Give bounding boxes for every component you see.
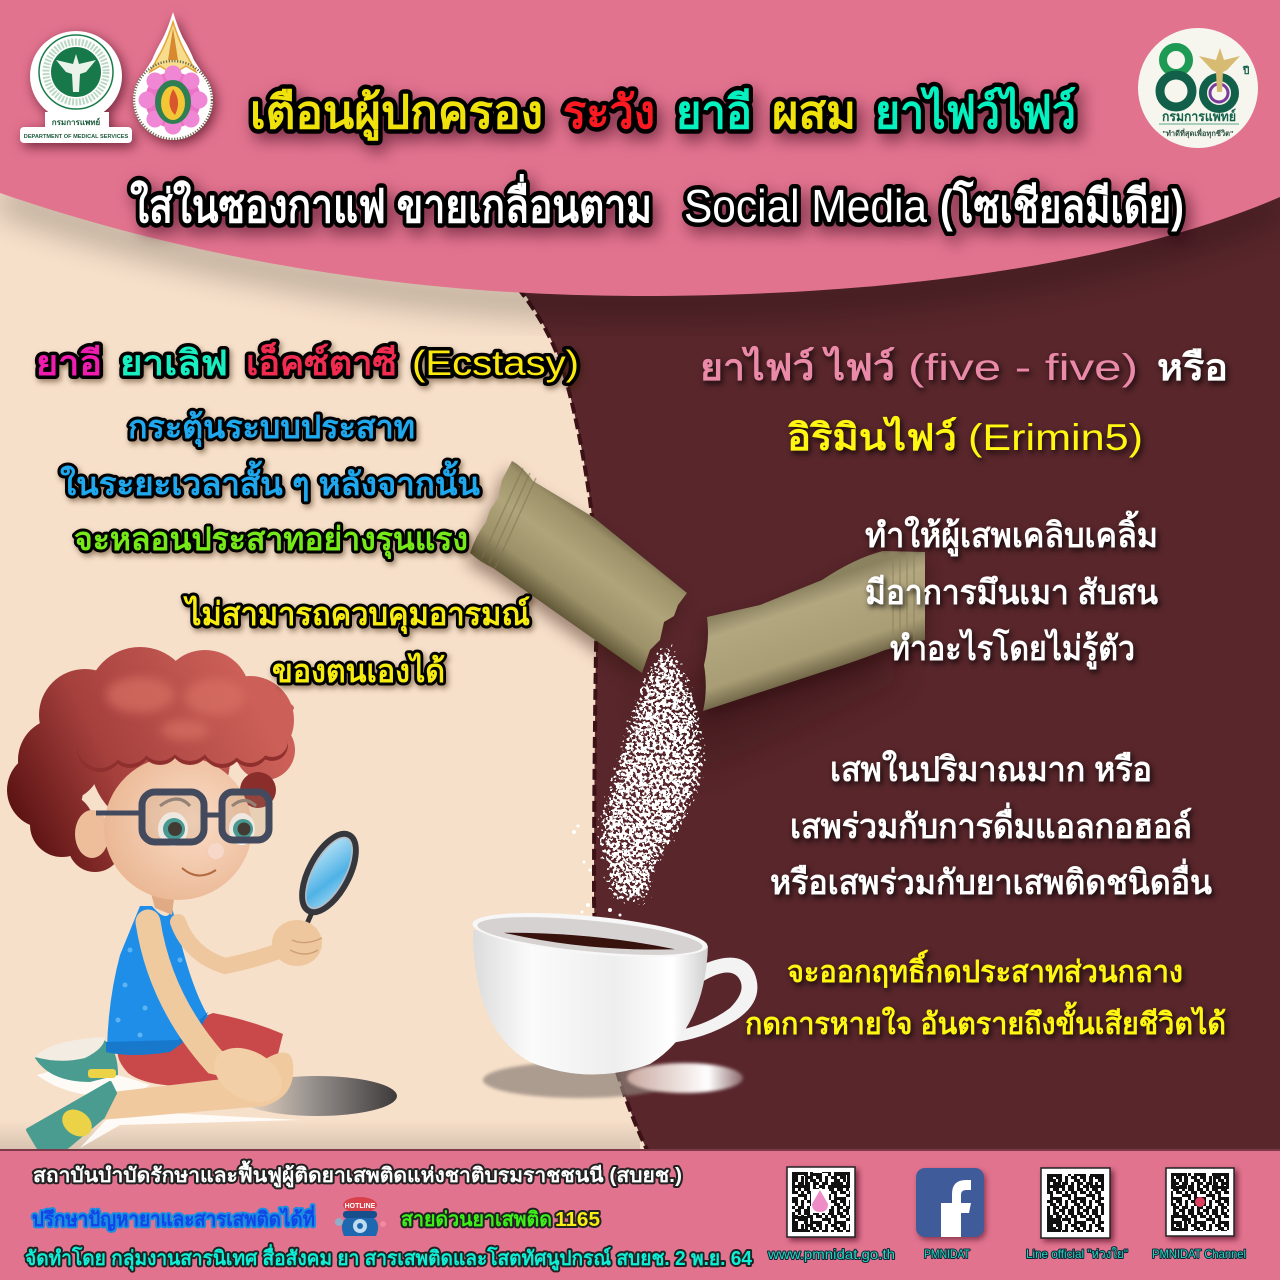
back hair right — [240, 772, 276, 808]
magnifying glass — [291, 826, 367, 926]
icon: facebook — [916, 1168, 984, 1237]
hair fringe — [70, 675, 288, 768]
text: overdose: หรือเสพร่วมกับยาเสพติดชนิดอื่น — [770, 858, 1212, 902]
heading: ecstasy: เอ็คซ์ตาซี — [246, 341, 397, 383]
title line 1: ระวัง — [563, 86, 655, 138]
logo: ministry of public health: DEPARTMENT OF MEDICAL SERVICES — [24, 134, 128, 140]
text: effects — [865, 510, 1158, 670]
shorts — [118, 1013, 283, 1086]
logo: 80 years — [1138, 28, 1258, 148]
heading: ecstasy: ยาเลิฟ — [120, 344, 228, 383]
text: overdose: เสพร่วมกับการดื่มแอลกอฮอล์ — [790, 802, 1192, 846]
text: stimulates nerves: กระตุ้นระบบประสาท — [128, 409, 415, 448]
front shoe — [28, 1083, 115, 1147]
title line 2: ใส่ในซองกาแฟ ขายเกลื่อนตาม — [130, 174, 652, 232]
header curve shadow — [0, 198, 1280, 304]
footer band — [0, 1150, 1280, 1280]
white shadow under leg — [37, 1069, 300, 1148]
neck — [150, 890, 175, 915]
logo: ministry of public health: กรมการแพทย์ — [52, 117, 101, 127]
text: short time: ในระยะเวลาสั้น ๆ หลังจากนั้น — [60, 460, 480, 502]
QR labels: PMNIDAT Channel — [1152, 1247, 1246, 1261]
QR code: channel — [1166, 1168, 1234, 1236]
hands on knee — [205, 1037, 291, 1113]
title line 1 — [250, 86, 1076, 141]
ear — [75, 810, 109, 858]
icon: coffee sachet right — [703, 551, 925, 711]
icon: white powder near cup on cream — [572, 824, 622, 916]
QR labels: PMNIDAT — [924, 1247, 971, 1261]
panel: dark right area — [518, 190, 1280, 1152]
logo: 80 years: กรมการแพทย์ — [1162, 108, 1236, 124]
boy shadow — [237, 1076, 397, 1116]
QR code: line official — [1041, 1168, 1110, 1238]
text: effects: มีอาการมึนเมา สับสน — [865, 574, 1158, 612]
heading: ecstasy: (Ecstasy) — [412, 344, 579, 383]
tank top — [106, 906, 208, 1055]
title line 1: ผสม — [772, 86, 856, 138]
panel: ecstasy text — [36, 341, 579, 689]
header pink band — [0, 0, 1280, 296]
eyes — [158, 799, 256, 846]
icon: hotline telephone: HOTLINE — [345, 1203, 376, 1210]
back hair — [7, 647, 295, 872]
title line 2: (โซเชียลมีเดีย) — [940, 179, 1184, 232]
title line 2 — [130, 174, 1184, 232]
text: overdose — [770, 749, 1212, 902]
QR labels: Line official "ห่วงใย" — [1026, 1247, 1128, 1261]
front arm — [148, 922, 268, 1074]
raised arm — [178, 922, 282, 966]
text: effects: ทำให้ผู้เสพเคลิบเคลิ้ม — [865, 510, 1158, 557]
text: effects: ทำอะไรโดยไม่รู้ตัว — [890, 628, 1135, 670]
footer line 2: 1165 — [555, 1209, 600, 1231]
logo: institute lotus — [133, 12, 213, 140]
footer line 2: สายด่วนยาเสพติด — [401, 1209, 552, 1231]
hair fringe edge — [77, 725, 288, 772]
face — [104, 756, 252, 900]
heading: erimin5 — [787, 415, 1143, 458]
title line 2: Social Media — [684, 180, 927, 232]
title line 1: ยาไฟว์ไฟว์ — [875, 86, 1076, 138]
title line 1: เตือนผู้ปกครอง — [250, 86, 543, 141]
glasses — [96, 792, 269, 842]
logo: 80 years: ปี — [1242, 65, 1249, 77]
icon: hotline telephone — [335, 1197, 386, 1236]
title line 1: ยาอี — [676, 86, 752, 138]
footer line 2: ปรึกษาปัญหายาและสารเสพติดได้ที่ — [32, 1204, 315, 1231]
heading: five five: ยาไฟว์ ไฟว์ — [700, 345, 895, 388]
illustration: boy with magnifying glass — [7, 647, 397, 1148]
logo: ministry of public health — [20, 31, 132, 143]
hand on magnifier — [272, 920, 322, 966]
icon: coffee sachet left — [470, 461, 687, 673]
front leg — [95, 1052, 293, 1120]
text: own emotions: ของตนเองได้ — [272, 652, 445, 689]
heading: ecstasy: ยาอี — [36, 344, 102, 383]
mouth — [182, 868, 216, 876]
footer line 1: สถาบันบำบัดรักษาและฟื้นฟูผู้ติดยาเสพติดแห่งชาติบรมราชชนนี (สบยช.) — [33, 1160, 682, 1189]
heading: five five — [700, 345, 1228, 388]
hair highlights — [106, 677, 245, 740]
QR labels — [767, 1246, 1246, 1262]
heading: erimin5: (Erimin5) — [968, 417, 1143, 458]
shade near bottom of cream panel — [0, 1120, 640, 1152]
heading: erimin5: อิริมินไฟว์ — [787, 415, 957, 458]
icon: coffee cup — [471, 905, 757, 1098]
shadow of sachets on dark area — [640, 630, 900, 770]
nose — [208, 843, 224, 859]
heading: five five: (five - five) — [908, 347, 1138, 388]
text: danger: กดการหายใจ อันตรายถึงขั้นเสียชีวิตได้ — [745, 1001, 1226, 1041]
text: danger: จะออกฤทธิ์กดประสาทส่วนกลาง — [787, 949, 1183, 989]
heading: five five: หรือ — [1157, 347, 1228, 388]
footer line 3: จัดทำโดย กลุ่มงานสารนิเทศ สื่อสังคม ยา สารเสพติดและโสตทัศนูปกรณ์ สบยช. 2 พ.ย. 64 — [25, 1243, 753, 1272]
icon: falling powder — [592, 625, 710, 910]
text: danger — [745, 949, 1226, 1041]
panel: five-five text — [700, 345, 1228, 1041]
footer line 2 — [32, 1204, 600, 1231]
QR labels: www.pmnidat.go.th — [767, 1246, 895, 1262]
text: overdose: เสพในปริมาณมาก หรือ — [830, 749, 1152, 789]
rear shoe — [35, 1037, 118, 1082]
logo: 80 years: "ทำดีที่สุดเพื่อทุกชีวิต" — [1162, 127, 1234, 138]
text: cannot control: ไม่สามารถควบคุมอารมณ์ — [183, 595, 530, 635]
heading: ecstasy — [36, 341, 579, 383]
QR code: website — [787, 1167, 855, 1237]
text: hallucinate: จะหลอนประสาทอย่างรุนแรง — [74, 521, 468, 560]
